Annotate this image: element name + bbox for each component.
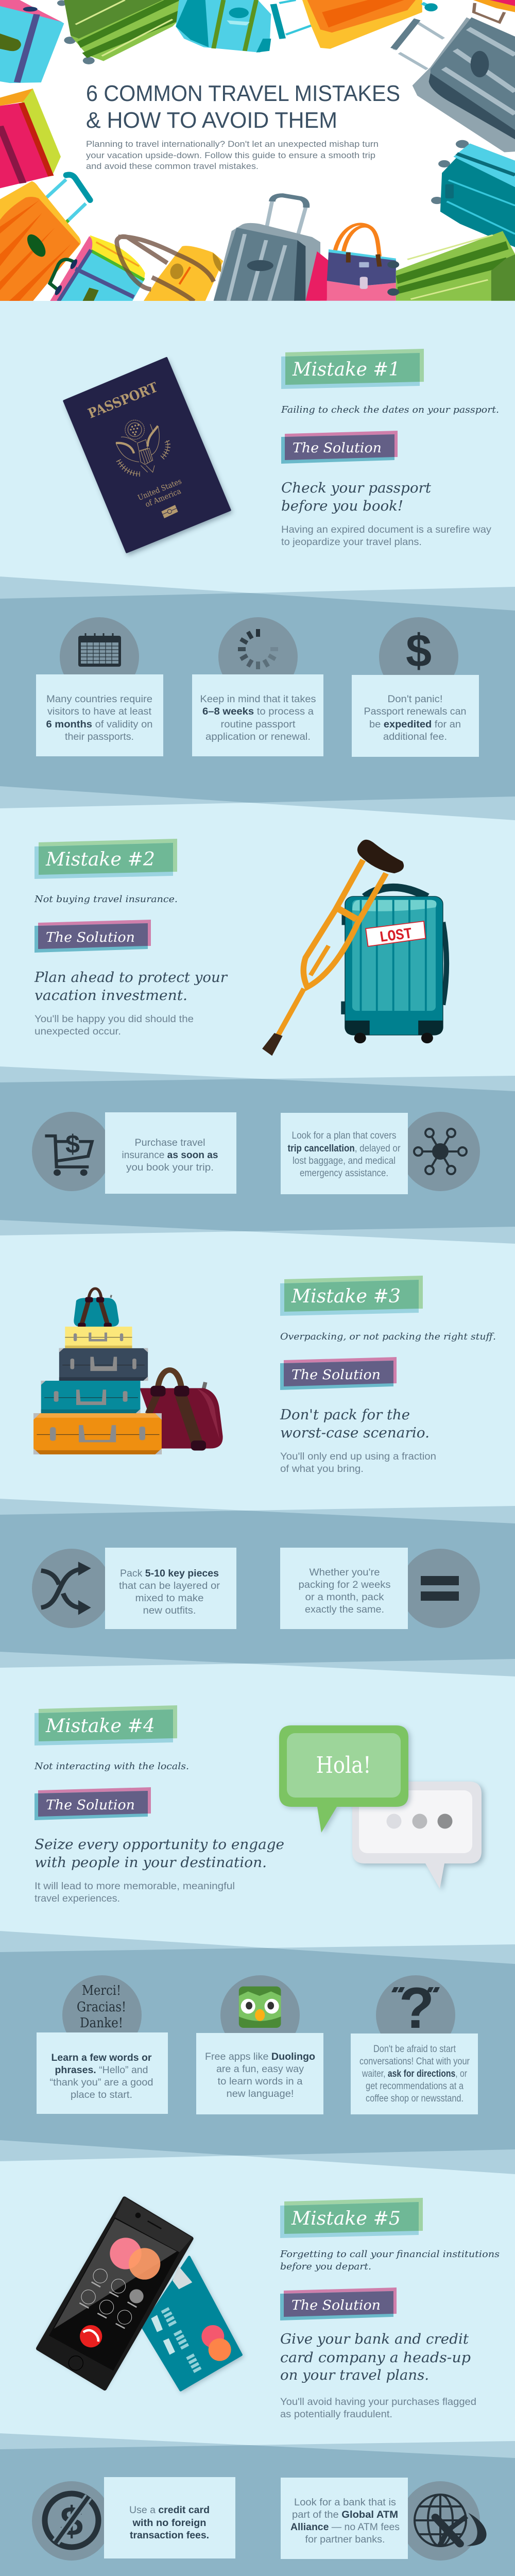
solution body — [280, 1451, 436, 1475]
mistake statement — [280, 2249, 500, 2272]
tip: no foreign fees card — [32, 2477, 235, 2561]
tip: same packing: exactly the same. — [305, 1604, 384, 1615]
bag: navy and pink — [305, 224, 396, 301]
tip: global ATM alliance: for partner banks. — [305, 2534, 385, 2545]
tip 3: dollar: Passport renewals can — [364, 706, 467, 717]
badge: Mistake #1: Mistake #1 — [292, 359, 400, 380]
badge: The Solution — [280, 1357, 397, 1390]
mistake statement: Overpacking, or not packing the right stuff. — [280, 1331, 496, 1342]
solution body: of what you bring. — [280, 1464, 364, 1475]
mistake statement: Forgetting to call your financial institutions — [280, 2249, 500, 2260]
suitcase: top orange with handle — [273, 0, 438, 49]
solution body: to jeopardize your travel plans. — [281, 537, 422, 548]
tip: plan coverage: emergency assistance. — [300, 1168, 388, 1179]
tip: plan coverage: lost baggage, and medical — [293, 1156, 396, 1166]
badge: Mistake #3 — [280, 1276, 423, 1316]
solution body — [35, 1881, 235, 1904]
solution heading — [34, 970, 228, 1004]
tip 3: dollar: be expedited for an — [369, 719, 461, 730]
band: mistake 1 tips — [0, 577, 515, 820]
solution body: as potentially fraudulent. — [280, 2409, 392, 2420]
tip: buy insurance: you book your trip. — [126, 1162, 214, 1173]
band: mistake 5 tips — [0, 2433, 515, 2576]
tip: learn phrases: “thank you” are a good — [49, 2077, 153, 2088]
solution body: Having an expired document is a surefire way — [281, 524, 492, 535]
suitcase: green lower right — [387, 231, 515, 301]
solution heading: on your travel plans. — [280, 2367, 429, 2383]
tip: plan coverage — [281, 1112, 480, 1194]
solution heading: vacation investment. — [35, 988, 187, 1004]
solution heading: Plan ahead to protect your — [34, 970, 228, 986]
illustration: passport: United States — [136, 477, 183, 502]
solution body: You'll only end up using a fraction — [280, 1451, 436, 1462]
icon: spinner — [238, 629, 278, 669]
tip: key pieces: mixed to make — [135, 1593, 204, 1604]
solution body — [281, 524, 492, 548]
icon: shuffle arrows — [41, 1562, 91, 1615]
tip: key pieces — [32, 1548, 236, 1629]
mistake statement: Not buying travel insurance. — [34, 894, 178, 905]
suitcase: left magenta — [0, 89, 61, 188]
tip: plan coverage: Look for a plan that covers — [291, 1130, 397, 1141]
title: & HOW TO AVOID THEM — [86, 108, 337, 133]
badge: Mistake #2 — [35, 839, 177, 879]
tip: key pieces: Pack 5-10 key pieces — [120, 1568, 219, 1579]
icon: greeting words — [77, 1983, 126, 2031]
tip: Duolingo: Free apps like Duolingo — [205, 2052, 315, 2062]
tip: learn phrases: place to start. — [71, 2090, 132, 2100]
solution heading: Seize every opportunity to engage — [35, 1837, 284, 1853]
badge: Mistake #4 — [35, 1705, 177, 1745]
icon: no dollar: $ — [60, 2498, 83, 2544]
icon: greeting words: Gracias! — [77, 1999, 126, 2015]
tip: same packing: Whether you're — [309, 1567, 380, 1578]
tip: learn phrases — [37, 1975, 168, 2114]
solution heading: Give your bank and credit — [280, 2331, 469, 2347]
suitcase: top green — [57, 0, 185, 64]
illustration: passport: PASSPORT — [86, 380, 160, 422]
tip 1: calendar — [36, 617, 163, 756]
mistake statement: Failing to check the dates on your passport. — [281, 404, 499, 415]
solution body: travel experiences. — [35, 1893, 120, 1904]
badge: Mistake #1 — [281, 349, 424, 389]
credit card — [143, 2257, 244, 2393]
section: mistake 2 — [34, 839, 447, 1056]
tip: Duolingo: new language! — [227, 2089, 294, 2099]
icon: dollar sign: $ — [406, 625, 432, 677]
tip: Duolingo: are a fun, easy way — [216, 2064, 304, 2075]
solution body: unexpected occur. — [35, 1026, 121, 1037]
title: 6 COMMON TRAVEL MISTAKES — [86, 81, 400, 106]
tip: same packing — [280, 1548, 480, 1629]
badge: Mistake #5 — [280, 2198, 423, 2238]
tip 1: calendar: 6 months of validity on — [46, 719, 152, 730]
solution body: It will lead to more memorable, meaningful — [35, 1881, 235, 1892]
badge: Mistake #2: Mistake #2 — [45, 849, 155, 870]
tip: key pieces: that can be layered or — [119, 1581, 220, 1591]
tip: start conversations: conversations! Chat with your — [359, 2056, 470, 2067]
illustration: lost suitcase and crutch: LOST — [379, 926, 414, 946]
icon: shopping cart with dollar — [45, 1130, 92, 1176]
illustration: speech bubbles — [279, 1725, 484, 1891]
suitcase: cyan and pink small — [50, 235, 145, 301]
tip: global ATM alliance: part of the Global ATM — [292, 2510, 398, 2520]
tip 3: dollar — [352, 617, 479, 757]
tip: start conversations — [351, 1975, 478, 2114]
tip: Duolingo — [196, 1975, 323, 2114]
solution heading — [281, 480, 431, 514]
badge: The Solution: The Solution — [291, 1367, 381, 1383]
illustration: speech bubbles: Hola! — [316, 1752, 371, 1778]
intro paragraph — [86, 139, 379, 171]
hero: suitcase border illustration — [0, 0, 515, 301]
tip 2: loading spinner: routine passport — [220, 719, 296, 730]
badge: The Solution: The Solution — [291, 2298, 381, 2313]
badge: The Solution: The Solution — [293, 440, 382, 456]
icon: calendar — [78, 633, 121, 667]
tip: global ATM alliance: Alliance — no ATM fees — [290, 2522, 400, 2533]
tip 1: calendar: visitors to have at least — [47, 706, 152, 717]
badge: Mistake #3: Mistake #3 — [291, 1286, 401, 1307]
solution heading: Don't pack for the — [280, 1407, 410, 1423]
suitcase: grey upright — [214, 195, 320, 301]
badge: The Solution: The Solution — [46, 930, 135, 945]
tip: buy insurance: insurance as soon as — [122, 1150, 218, 1161]
tip 3: dollar: additional fee. — [383, 732, 447, 742]
solution body: You'll avoid having your purchases flagged — [280, 2397, 476, 2408]
tip: global ATM alliance: Look for a bank that is — [294, 2497, 396, 2508]
solution body — [280, 2397, 476, 2420]
section: mistake 1 — [64, 349, 499, 555]
solution heading: with people in your destination. — [35, 1855, 267, 1871]
tip: key pieces: new outfits. — [143, 1605, 196, 1616]
tip 1: calendar: Many countries require — [46, 694, 152, 705]
solution heading: card company a heads-up — [280, 2350, 471, 2366]
band: mistake 4 tips — [0, 1931, 515, 2174]
section: mistake 4 — [34, 1705, 484, 1904]
icon: Duolingo owl — [239, 1987, 281, 2028]
tip: no foreign fees card: Use a credit card — [129, 2505, 210, 2516]
title — [86, 81, 400, 133]
tip 2: loading spinner: Keep in mind that it takes — [200, 694, 316, 705]
suitcase: teal right — [431, 140, 515, 247]
tip 2: loading spinner: application or renewal. — [205, 732, 311, 742]
solution heading: before you book! — [281, 498, 403, 514]
suitcase: top cyan — [176, 0, 271, 53]
phone body — [38, 2197, 192, 2389]
badge: Mistake #5: Mistake #5 — [291, 2208, 401, 2229]
tip: learn phrases: Learn a few words or — [52, 2053, 152, 2063]
illustration: passport: of America — [144, 487, 182, 509]
solution heading: Check your passport — [281, 480, 431, 496]
tip 1: calendar: their passports. — [65, 732, 134, 742]
intro paragraph: Planning to travel internationally? Don't let an unexpected mishap turn — [86, 139, 379, 149]
icon: question mark in quotes: ? — [399, 1976, 434, 2040]
badge: The Solution — [35, 920, 151, 953]
icon: no dollar — [45, 2494, 98, 2547]
illustration: lost suitcase and crutch — [262, 840, 447, 1056]
band: mistake 3 tips — [0, 1499, 515, 1676]
tip: start conversations: Don't be afraid to start — [373, 2044, 456, 2055]
badge: The Solution — [280, 2287, 397, 2320]
tip: plan coverage: trip cancellation, delayed or — [287, 1143, 401, 1154]
solution heading — [35, 1837, 284, 1871]
tip 3: dollar: Don't panic! — [387, 694, 443, 705]
illustration: phone and credit card — [38, 2197, 244, 2393]
tip 2: loading spinner: 6–8 weeks to process a — [202, 706, 314, 717]
badge: The Solution: The Solution — [46, 1798, 135, 1813]
tip: learn phrases: phrases. “Hello” and — [55, 2065, 148, 2076]
icon: shopping cart with dollar: $ — [65, 1130, 80, 1159]
mistake statement: before you depart. — [280, 2261, 371, 2272]
intro paragraph: and avoid these common travel mistakes. — [86, 161, 259, 171]
bag: yellow with brown straps — [117, 236, 223, 301]
suitcase: orange lower left — [0, 175, 90, 301]
tip: start conversations: waiter, ask for directions, or — [362, 2069, 468, 2079]
tip: buy insurance: Purchase travel — [135, 1138, 205, 1148]
intro paragraph: your vacation upside-down. Follow this guide to ensure a smooth trip — [86, 150, 375, 160]
solution heading: worst-case scenario. — [280, 1425, 430, 1441]
solution heading — [280, 1407, 430, 1441]
band: mistake 2 tips — [0, 1066, 515, 1244]
badge: Mistake #4: Mistake #4 — [45, 1716, 155, 1737]
solution body: You'll be happy you did should the — [35, 1014, 194, 1025]
icon: network — [414, 1129, 467, 1174]
suitcases: lower-left orange, cyan and yellow bag — [0, 175, 223, 301]
tip: global ATM alliance — [281, 2478, 487, 2561]
tip 2: loading spinner — [192, 617, 323, 756]
suitcase: large grey right — [393, 18, 515, 152]
tip: no foreign fees card: transaction fees. — [130, 2530, 209, 2541]
tip: start conversations: coffee shop or newsstand. — [366, 2093, 464, 2104]
mistake statement: Not interacting with the locals. — [34, 1761, 189, 1772]
suitcase: top-left cyan — [0, 0, 64, 83]
tip: Duolingo: to learn words in a — [217, 2076, 303, 2087]
tip: no foreign fees card: with no foreign — [132, 2518, 206, 2529]
badge: The Solution — [281, 431, 398, 464]
tip: same packing: or a month, pack — [305, 1592, 384, 1603]
suitcase: top-right corner — [473, 0, 515, 22]
illustration: passport — [64, 358, 233, 555]
icon: greeting words: Danke! — [80, 2015, 123, 2031]
tip: same packing: packing for 2 weeks — [299, 1580, 390, 1590]
badge: The Solution — [35, 1787, 151, 1820]
icon: equals sign — [421, 1576, 459, 1601]
section: mistake 5 — [38, 2197, 500, 2420]
tip: start conversations: get recommendations at a — [366, 2081, 464, 2092]
icon: greeting words: Merci! — [82, 1983, 121, 1998]
icon: globe and plane — [415, 2495, 487, 2546]
solution body — [35, 1014, 194, 1037]
section: mistake 3 — [33, 1276, 496, 1475]
solution heading — [280, 2331, 471, 2383]
illustration: stacked luggage — [33, 1289, 223, 1454]
tip: buy insurance — [32, 1112, 236, 1194]
